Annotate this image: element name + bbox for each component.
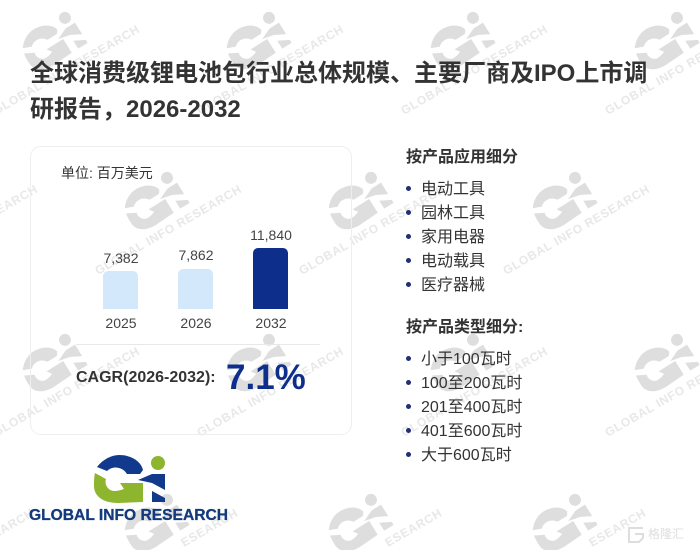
watermark pattern: ESEARCH <box>586 506 649 550</box>
list: applications: 电动工具 <box>421 181 485 198</box>
list: types: 100至200瓦时 <box>421 375 522 392</box>
list: applications: 园林工具 <box>421 205 485 222</box>
source watermark: Gelonghui: 格隆汇 <box>648 527 684 541</box>
list: types: 401至600瓦时 <box>421 423 522 440</box>
watermark pattern: GLOBAL INFO RESEARCH <box>398 22 550 118</box>
list: applications: 医疗器械 <box>421 277 485 294</box>
list: applications <box>406 180 485 294</box>
list: types: 小于100瓦时 <box>421 351 512 368</box>
unit label: 单位: 百万美元 <box>61 165 153 181</box>
watermark pattern: ESEARCH <box>382 506 445 550</box>
list: types: 大于600瓦时 <box>421 447 512 464</box>
CAGR value: 7.1% <box>226 358 306 397</box>
list: applications: 家用电器 <box>421 229 485 246</box>
watermark pattern: GLOBAL INFO RESEARCH <box>296 182 448 278</box>
source watermark: Gelonghui <box>628 527 684 543</box>
heading: by type: 按产品类型细分: <box>406 319 523 336</box>
year label 2025: 2025 <box>105 315 137 331</box>
icon: green dot <box>151 456 165 470</box>
icon: green body of G <box>94 473 143 503</box>
bar 2025 <box>103 271 138 309</box>
year label 2032: 2032 <box>255 315 287 331</box>
CAGR label: CAGR(2026-2032): <box>76 369 216 386</box>
heading: by application: 按产品应用细分 <box>406 149 518 166</box>
icon: blue arc of G <box>97 455 143 474</box>
watermark pattern: GLOBAL INFO RESEARCH <box>398 344 550 440</box>
watermark pattern: GLOBAL INFO RESEARCH <box>194 22 346 118</box>
list: types: 201至400瓦时 <box>421 399 522 416</box>
list: types <box>406 350 522 464</box>
icon: blue numeral i <box>138 474 165 502</box>
list: applications: 电动载具 <box>421 253 485 270</box>
value label 2026: 7,862 <box>178 247 214 263</box>
value label 2032: 11,840 <box>250 227 292 243</box>
bar chart <box>103 227 292 331</box>
watermark pattern: GLOBAL INFO RESEARCH <box>92 182 244 278</box>
panel: market size chart card <box>30 146 352 435</box>
logo: Global Info Research <box>29 455 228 524</box>
bar 2026 <box>178 269 213 309</box>
year label 2026: 2026 <box>180 315 212 331</box>
title: 全球消费级锂电池包行业总体规模、主要厂商及IPO上市调研报告，2026-2032 <box>30 60 647 123</box>
watermark pattern: GLOBAL INFO RESEARCH <box>194 344 346 440</box>
bar 2032 <box>253 248 288 309</box>
watermark pattern: ESEARCH <box>178 506 241 550</box>
value label 2025: 7,382 <box>103 250 139 266</box>
watermark pattern: GLOBAL INFO RESEARCH <box>500 182 652 278</box>
logo wordmark: GLOBAL INFO RESEARCH <box>29 507 228 524</box>
